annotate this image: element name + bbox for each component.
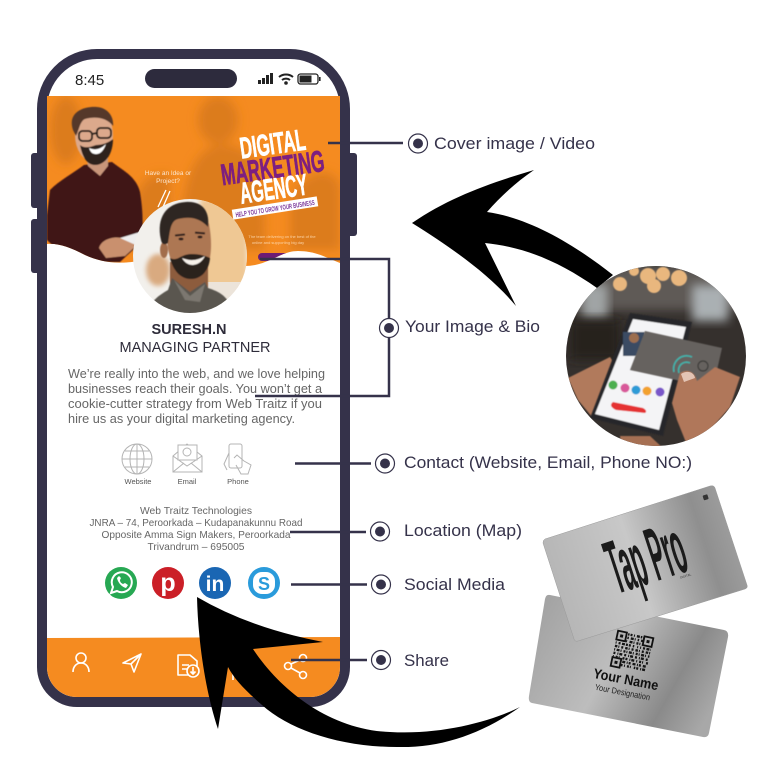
target marker: [380, 318, 398, 338]
target marker: [376, 454, 394, 473]
website icon: [122, 444, 152, 474]
hair: [160, 202, 208, 244]
save contact button: [611, 402, 646, 413]
target marker: [372, 575, 390, 594]
callout: image and bio: [255, 259, 540, 396]
target marker: [372, 650, 390, 670]
portrait background: [133, 199, 247, 300]
thumbnail nail: [681, 372, 695, 382]
paper: [120, 232, 140, 246]
camera notch: [145, 69, 237, 88]
profile portrait: [133, 199, 247, 320]
label: Share: [404, 652, 449, 670]
neck: [170, 262, 208, 292]
leader line: [291, 583, 367, 586]
tagline banner: HELP YOU TO GROW YOUR BUSINESS: [235, 200, 315, 219]
linkedin: [199, 567, 231, 599]
right hand: [672, 367, 740, 445]
name: SURESH.N: [152, 322, 226, 338]
phone icon: [224, 444, 251, 474]
shirt: [47, 162, 143, 262]
social icons: [105, 567, 280, 599]
eyes and brows: [175, 232, 205, 240]
photo: tapping card on phone: [566, 266, 746, 450]
fingers under phone: [620, 435, 661, 446]
linkedin: in: [206, 573, 224, 596]
head: [74, 116, 114, 159]
face: [166, 217, 212, 260]
leader line: [328, 142, 403, 144]
agency: AGENCY: [238, 169, 310, 211]
callout: cover image: [328, 134, 595, 153]
leader line: [291, 659, 367, 661]
nav background: [47, 637, 340, 697]
phone side buttons: [31, 153, 357, 273]
whatsapp: [105, 567, 137, 599]
your designation: Your Designation: [594, 682, 651, 702]
bio paragraph: hire us as your digital marketing agency.: [68, 411, 295, 426]
logo subtext: DIGITAL: [680, 572, 692, 580]
document icon: [178, 655, 199, 677]
tagline banner: [232, 196, 318, 220]
person icon: [73, 653, 89, 672]
pinterest: p: [160, 569, 176, 597]
idea caption: Project?: [156, 178, 180, 185]
bottom navigation bar: [47, 637, 340, 697]
jacket: [154, 278, 228, 313]
arrow: from tap photo to cover: [412, 170, 613, 306]
target marker: [370, 522, 390, 541]
app buttons: [608, 380, 618, 390]
contact icons: [122, 444, 251, 486]
skype: S: [258, 574, 270, 594]
wifi icon: [279, 74, 293, 84]
share icon: [284, 654, 306, 678]
role: MANAGING PARTNER: [120, 340, 270, 356]
purple button: [258, 253, 289, 261]
beard: [170, 254, 210, 279]
glasses: [79, 128, 111, 141]
email icon: [173, 444, 202, 472]
bracket line: [255, 259, 389, 396]
qr code: [611, 631, 653, 673]
profile name and role: [120, 322, 270, 356]
cover image: [47, 96, 340, 268]
bio paragraph: We’re really into the web, and we love helping: [68, 366, 325, 381]
man with glasses: [47, 107, 143, 262]
faint background figures: [50, 96, 340, 250]
front card: [543, 486, 747, 641]
metal cards: [529, 486, 747, 737]
blurred venue background: [566, 266, 746, 446]
small copy: The team delivering on the best of the: [248, 234, 316, 239]
label: Your Image & Bio: [405, 318, 540, 336]
send icon: [123, 654, 141, 672]
marketing: MARKETING: [219, 145, 326, 192]
phone mockup: [31, 54, 357, 702]
address block: JNRA – 74, Peroorkada – Kudapanakunnu Road: [90, 517, 303, 529]
clock: 8:45: [75, 72, 104, 89]
target marker: [408, 134, 428, 153]
nfc chip mark: [702, 494, 709, 500]
neck: [86, 155, 108, 176]
idea caption: [145, 170, 192, 185]
hair: [72, 107, 113, 136]
contact labels: Website: [125, 477, 151, 486]
partly hidden icon: [232, 672, 234, 680]
leader line: [290, 531, 366, 533]
back card: [529, 595, 728, 737]
contact labels: [125, 477, 249, 486]
arrow: from cards to phone: [197, 597, 520, 747]
callout: location: [290, 522, 522, 541]
small copy: online and supporting big day: [252, 240, 304, 245]
address block: Opposite Amma Sign Makers, Peroorkada: [102, 529, 291, 541]
battery icon: [298, 74, 321, 84]
contact labels: Phone: [227, 477, 249, 486]
profile thumbnail: [623, 332, 645, 356]
left hand: [568, 356, 612, 416]
headline: [220, 130, 324, 204]
pinterest: [152, 567, 184, 599]
leader line: [295, 462, 371, 465]
your name: Your Name: [592, 665, 660, 693]
digital: DIGITAL: [238, 124, 308, 166]
bio paragraph: businesses reach their goals. You won’t get a: [68, 381, 323, 396]
phone in hand: [590, 313, 692, 436]
bio paragraph: cookie-cutter strategy from Web Traitz if you: [68, 396, 322, 411]
callout: social media: [291, 575, 506, 594]
label: Cover image / Video: [434, 135, 595, 153]
callout: contact: [295, 454, 692, 473]
phone body: [42, 54, 345, 702]
signal icon: [258, 73, 273, 84]
ear: [160, 242, 168, 258]
label: Contact (Website, Email, Phone NO:): [404, 454, 692, 472]
label: Social Media: [404, 576, 506, 594]
contact labels: Email: [178, 477, 197, 486]
small copy: [248, 236, 316, 245]
address block: [90, 505, 303, 553]
label: Location (Map): [404, 522, 522, 540]
nav icons: [73, 653, 306, 680]
address block: Trivandrum – 695005: [148, 541, 245, 553]
bokeh lights: [613, 266, 687, 293]
beard: [80, 139, 113, 165]
bio paragraph: [68, 366, 325, 426]
hand: [99, 237, 137, 258]
cover background: [47, 96, 340, 268]
skype: [248, 567, 280, 599]
address block: Web Traitz Technologies: [140, 505, 252, 517]
callout: share: [291, 650, 449, 670]
nfc card: [630, 331, 722, 388]
status bar: [75, 69, 321, 89]
pen icon: [158, 190, 170, 207]
idea caption: Have an Idea or: [145, 170, 192, 177]
